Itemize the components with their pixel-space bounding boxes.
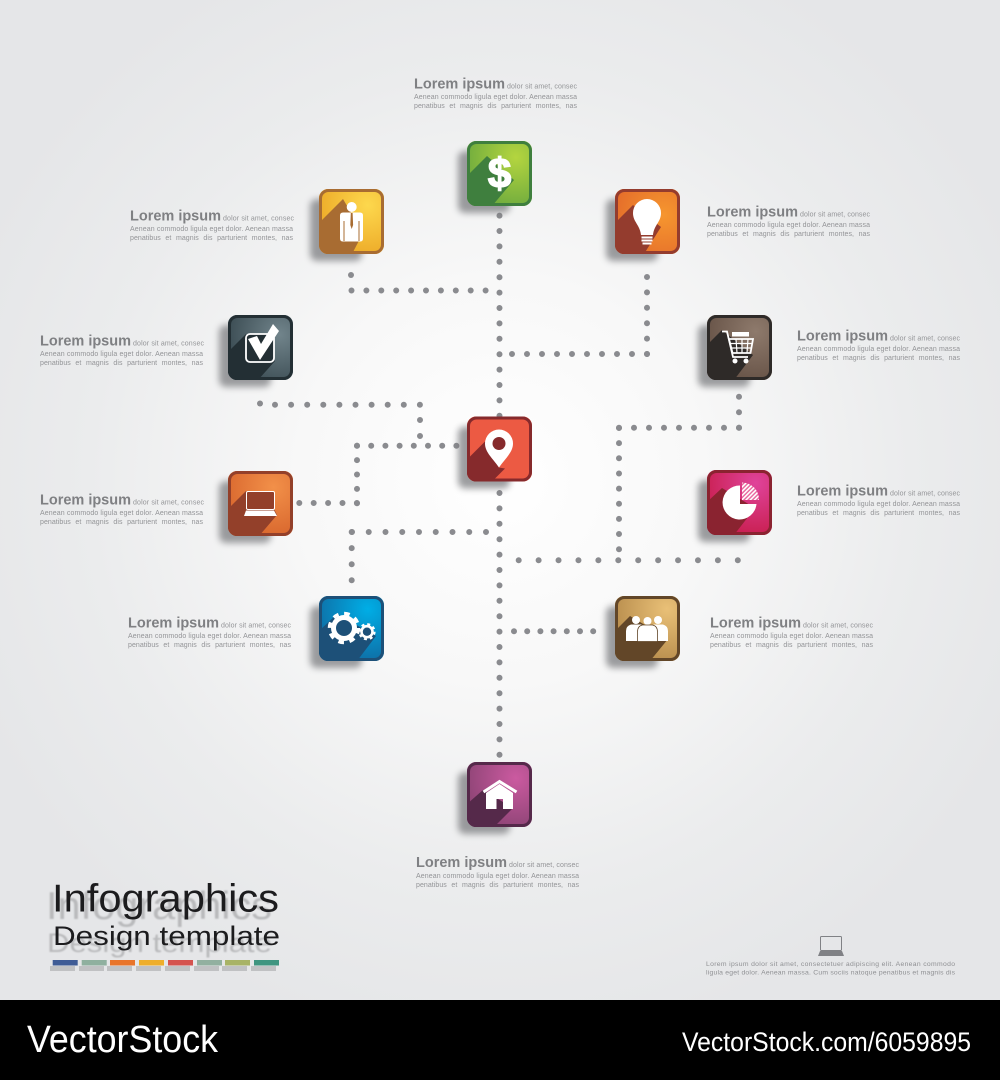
text block: home bbox=[416, 855, 580, 889]
text block: light bulb: Lorem ipsum bbox=[707, 204, 798, 220]
text block: laptop: penatibus et magnis dis parturient montes, nas bbox=[40, 519, 204, 526]
icon tile: shopping cart bbox=[698, 315, 772, 387]
connector: light bulb branch bbox=[511, 277, 647, 355]
text block: team: penatibus et magnis dis parturient montes, nas bbox=[710, 642, 874, 649]
text block: businessman: Lorem ipsum bbox=[130, 208, 221, 224]
connector: pie chart branch bbox=[519, 557, 739, 563]
icon tile: home bbox=[458, 762, 532, 834]
text block: home: penatibus et magnis dis parturient montes, nas bbox=[416, 882, 580, 889]
connector: team branch bbox=[514, 628, 594, 634]
text block: businessman: penatibus et magnis dis parturient montes, nas bbox=[130, 235, 294, 242]
title: Infographics Design template: Design template bbox=[53, 921, 280, 951]
text block: light bulb: Aenean commodo ligula eget dolor. Aenean massa bbox=[707, 222, 870, 229]
icon tile: laptop bbox=[219, 471, 293, 543]
connector: main upper trunk bbox=[496, 216, 502, 417]
icon tile: location pin bbox=[458, 416, 532, 488]
icon tile: pie chart bbox=[698, 470, 772, 542]
text block: laptop bbox=[40, 492, 204, 526]
icon tile: businessman bbox=[310, 189, 384, 261]
text block: shopping cart: Lorem ipsum bbox=[797, 328, 888, 344]
text block: shopping cart: Aenean commodo ligula eget dolor. Aenean massa bbox=[797, 346, 960, 353]
text block: laptop: Lorem ipsum bbox=[40, 492, 131, 508]
text block: pie chart: Aenean commodo ligula eget dolor. Aenean massa bbox=[797, 501, 960, 508]
text block: pie chart: penatibus et magnis dis parturient montes, nas bbox=[797, 510, 960, 517]
text block: gears: dolor sit amet, consec bbox=[221, 622, 292, 630]
connector: cart branch bbox=[618, 397, 739, 550]
footer band bbox=[0, 1000, 1000, 1080]
text block: gears: Lorem ipsum bbox=[128, 616, 219, 632]
text block: top: dolor sit amet, consec bbox=[507, 84, 578, 90]
text block: pie chart bbox=[797, 484, 960, 517]
text block: home: Lorem ipsum bbox=[416, 855, 507, 871]
text block: shopping cart: penatibus et magnis dis parturient montes, nas bbox=[797, 355, 960, 362]
text block: pie chart: dolor sit amet, consec bbox=[890, 490, 960, 498]
text block: shopping cart bbox=[797, 328, 960, 362]
title: Infographics Design template bbox=[46, 878, 280, 958]
text block: gears: Aenean commodo ligula eget dolor. Aenean massa bbox=[128, 633, 291, 640]
text block: checkbox bbox=[40, 334, 204, 367]
text block: checkbox: dolor sit amet, consec bbox=[133, 340, 204, 348]
icon tile: dollar: $ bbox=[488, 150, 511, 196]
footnote text: Lorem ipsum dolor sit amet, consectetuer adipiscing elit. Aenean commodo bbox=[706, 961, 955, 968]
text block: gears bbox=[128, 616, 292, 649]
text block: businessman: Aenean commodo ligula eget dolor. Aenean massa bbox=[130, 226, 293, 233]
text block: businessman: dolor sit amet, consec bbox=[223, 216, 294, 222]
text block: top bbox=[414, 76, 578, 110]
connector: laptop branch bbox=[299, 446, 457, 504]
text block: businessman bbox=[130, 208, 294, 242]
icon tile: light bulb bbox=[606, 189, 680, 261]
footnote text bbox=[706, 961, 956, 976]
icon tile: dollar bbox=[458, 141, 532, 213]
legend colour bars bbox=[50, 960, 279, 971]
footer image id: VectorStock.com/6059895 bbox=[682, 1027, 971, 1057]
text block: team: Lorem ipsum bbox=[710, 616, 801, 632]
title: Infographics Design template: Infographics bbox=[52, 878, 279, 920]
title: Infographics Design template: Design template bbox=[47, 928, 272, 958]
text block: top: Aenean commodo ligula eget dolor. Aenean massa bbox=[414, 94, 577, 101]
text block: top: Lorem ipsum bbox=[414, 76, 505, 92]
text block: light bulb: dolor sit amet, consec bbox=[800, 212, 870, 218]
text block: shopping cart: dolor sit amet, consec bbox=[890, 336, 960, 342]
connector: main lower trunk bbox=[496, 478, 502, 756]
footer brand: VectorStock bbox=[27, 1019, 219, 1061]
icon tile: checkbox bbox=[219, 315, 293, 387]
connector: businessman branch bbox=[351, 275, 487, 290]
text block: light bulb bbox=[707, 204, 870, 238]
text block: team bbox=[710, 616, 874, 649]
connector: checkbox branch bbox=[260, 404, 421, 437]
text block: pie chart: Lorem ipsum bbox=[797, 484, 888, 500]
text block: light bulb: penatibus et magnis dis parturient montes, nas bbox=[707, 231, 870, 238]
text block: home: Aenean commodo ligula eget dolor. Aenean massa bbox=[416, 873, 579, 880]
text block: laptop: Aenean commodo ligula eget dolor. Aenean massa bbox=[40, 510, 203, 517]
connector: gears branch bbox=[352, 532, 487, 582]
text block: top: penatibus et magnis dis parturient montes, nas bbox=[414, 103, 578, 110]
text block: team: Aenean commodo ligula eget dolor. Aenean massa bbox=[710, 633, 873, 640]
icon tile: gears bbox=[310, 596, 384, 668]
icon tile: team bbox=[606, 596, 680, 668]
text block: laptop: dolor sit amet, consec bbox=[133, 500, 204, 506]
text block: home: dolor sit amet, consec bbox=[509, 862, 580, 869]
footnote text: ligula eget dolor. Aenean massa. Cum sociis natoque penatibus et magnis dis bbox=[706, 970, 956, 976]
text block: checkbox: penatibus et magnis dis parturient montes, nas bbox=[40, 360, 204, 367]
text block: team: dolor sit amet, consec bbox=[803, 622, 874, 630]
text block: gears: penatibus et magnis dis parturient montes, nas bbox=[128, 642, 292, 649]
text block: checkbox: Lorem ipsum bbox=[40, 334, 131, 350]
text block: checkbox: Aenean commodo ligula eget dolor. Aenean massa bbox=[40, 351, 203, 358]
title: Infographics Design template: Infographics bbox=[46, 885, 272, 928]
icon: small laptop bbox=[818, 936, 844, 956]
